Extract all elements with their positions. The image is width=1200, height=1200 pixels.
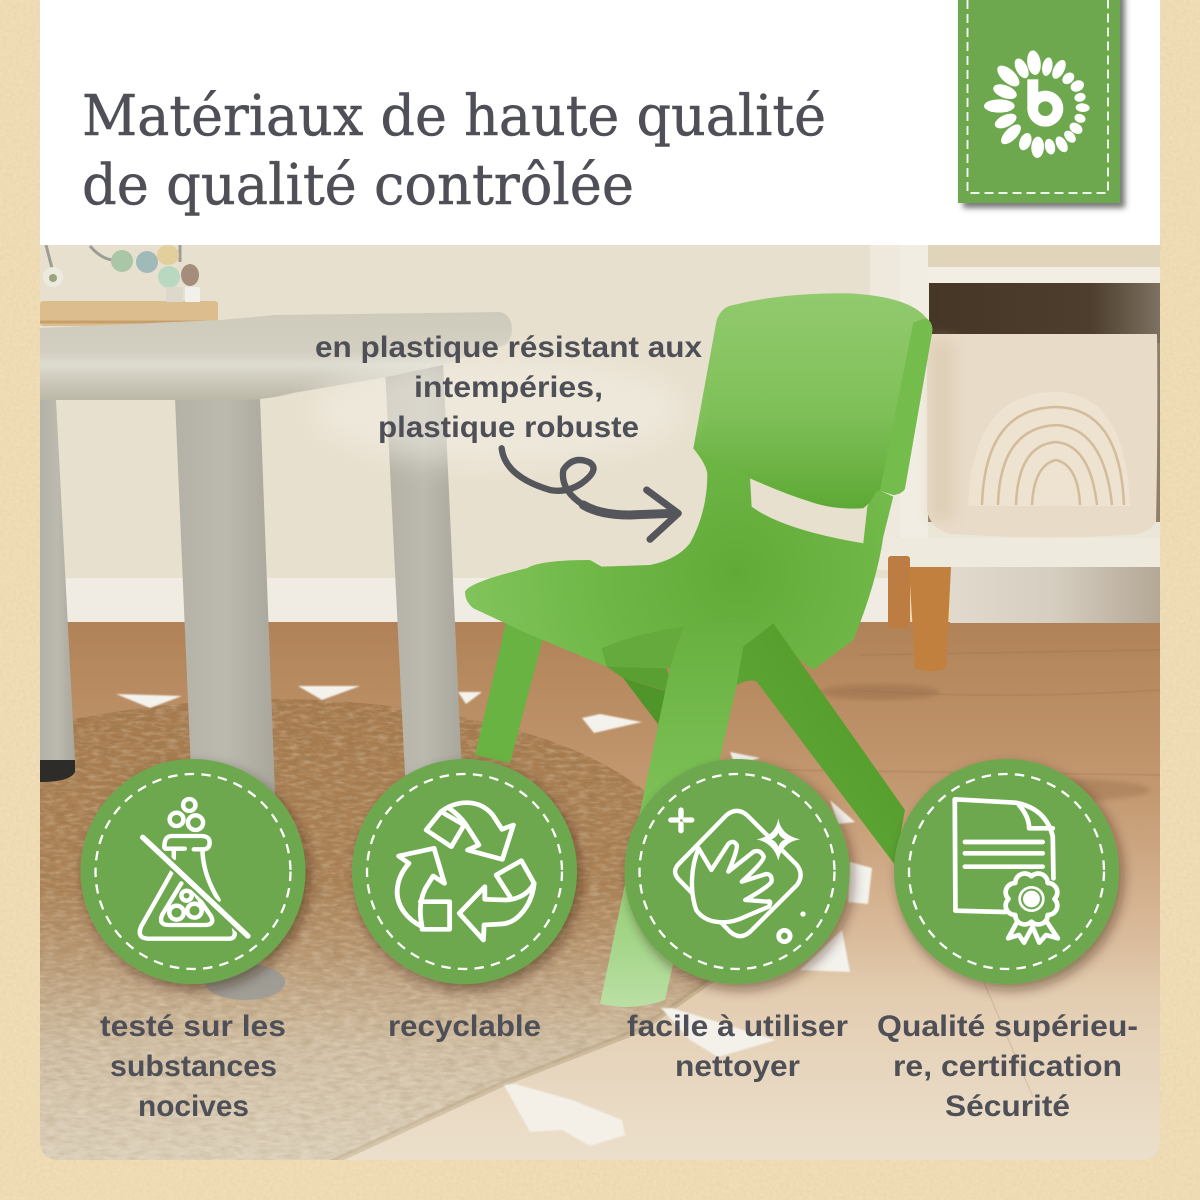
callout text: intempéries, [414,371,603,404]
icon: hand wiping with cloth [671,810,806,942]
caption: tested for harmful substances [100,1010,286,1123]
icon: crossed flask [140,799,248,939]
table: front leg [175,398,275,795]
table: left leg [40,400,75,782]
icon: recycle arrows [397,803,534,940]
arrow: curly pointer to chair [502,448,678,539]
badge: quality certificate [894,759,1119,984]
caption: easy to clean: facile à utiliser [627,1010,848,1043]
caption: tested for harmful substances: testé sur les [100,1010,286,1043]
badge: recyclable [352,759,577,984]
badge: no harmful substances [80,759,306,984]
header panel [40,0,1160,245]
storage basket [927,334,1157,537]
caption: tested for harmful substances: nocives [138,1090,249,1123]
callout text glow [313,355,683,465]
chair: fading front leg [600,626,756,1007]
bottom fade [40,1012,1034,1160]
caption: tested for harmful substances: substances [110,1050,277,1083]
photo panel: child chair in a playroom [30,245,1160,1165]
brand tag with logo [958,0,1120,203]
chair: right leg [737,623,905,865]
title [82,84,826,218]
bead toy on board [40,245,218,326]
wall [40,245,900,585]
caption: easy to clean [627,1010,848,1083]
icon: brand logo flower [984,50,1090,158]
chair: rear legs [475,620,675,763]
chair: seat front plate [602,627,683,668]
caption: recyclable: recyclable [388,1010,541,1043]
callout text: en plastique résistant aux [315,331,702,364]
caption: superior quality, safety certification: Qualité supérieu- [877,1010,1138,1043]
icon: certificate with seal [955,799,1058,943]
rug tassels [116,686,872,1146]
table top [40,312,512,400]
callout text: plastique robuste [378,411,639,444]
jute rug [30,699,714,1165]
shelf unit [870,245,1160,623]
shelf legs [888,556,951,671]
table: back leg [385,362,462,775]
green plastic chair [465,293,932,1007]
title: Matériaux de haute qualité [82,84,826,149]
caption: easy to clean: nettoyer [675,1050,800,1083]
callout text [315,331,702,444]
chair: seat and back support [465,448,893,670]
chair: backrest [693,293,932,509]
wooden floor [40,622,1160,1162]
title: de qualité contrôlée [82,153,634,218]
caption: superior quality, safety certification: Sécurité [945,1090,1070,1123]
badge: easy to clean [624,759,850,984]
caption: superior quality, safety certification [877,1010,1138,1123]
baseboard [66,578,888,622]
table foot [205,964,285,1000]
caption: superior quality, safety certification: re, certification [893,1050,1122,1083]
